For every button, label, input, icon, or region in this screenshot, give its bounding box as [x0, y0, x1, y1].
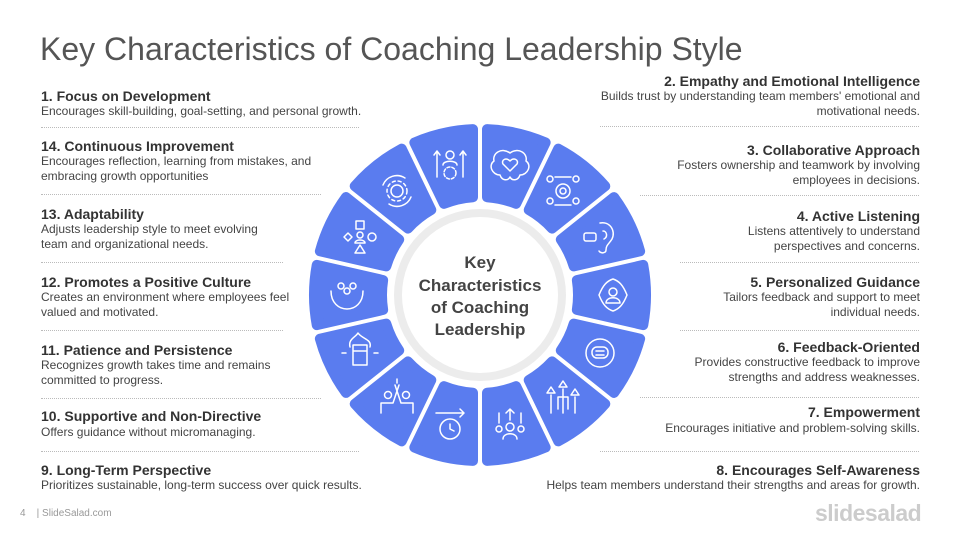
left item 12: valued and motivated.	[41, 305, 158, 319]
left item 11: committed to progress.	[41, 373, 163, 387]
left item 11	[41, 342, 270, 387]
right item 8	[546, 462, 920, 492]
left item 9	[41, 462, 362, 492]
icon: ear listening	[584, 223, 613, 253]
left item 13	[41, 206, 258, 251]
center circle: of Coaching	[431, 298, 529, 317]
left item 1: 1. Focus on Development	[41, 88, 211, 104]
left item 1: Encourages skill-building, goal-setting, and personal growth.	[41, 104, 361, 118]
right item 6: strengths and address weaknesses.	[729, 370, 920, 384]
right item 6	[695, 339, 920, 384]
icon: hands with people	[331, 283, 363, 309]
right item 4: Listens attentively to understand	[748, 224, 920, 238]
left item 13: Adjusts leadership style to meet evolving	[41, 222, 258, 236]
right item 2	[601, 73, 920, 118]
left item 14: 14. Continuous Improvement	[41, 138, 234, 154]
right item 4: perspectives and concerns.	[774, 239, 920, 253]
right item 5: individual needs.	[831, 305, 920, 319]
icon: collaboration	[547, 176, 579, 205]
icon: personalized guidance	[599, 279, 627, 311]
left item 10	[41, 408, 261, 439]
icon: high five	[381, 379, 413, 413]
left item 14: embracing growth opportunities	[41, 169, 208, 183]
icon: empowerment	[547, 381, 579, 413]
icon: feedback	[586, 339, 614, 367]
right item 2: 2. Empathy and Emotional Intelligence	[664, 73, 920, 89]
left item 10: 10. Supportive and Non-Directive	[41, 408, 261, 424]
left item 12	[41, 274, 289, 319]
left item 1	[41, 88, 361, 118]
center circle	[394, 209, 566, 381]
right item 5	[723, 274, 920, 319]
center circle: Key	[464, 253, 496, 272]
right item 3: Fosters ownership and teamwork by involving	[677, 158, 920, 172]
right item 3: 3. Collaborative Approach	[747, 142, 920, 158]
footer logo: slidesalad	[815, 500, 921, 526]
center circle: Characteristics	[419, 276, 541, 295]
right item 4	[748, 208, 920, 253]
left item 14	[41, 138, 311, 183]
right item 7: Encourages initiative and problem-solving skills.	[665, 421, 920, 435]
icon: self-awareness	[496, 409, 524, 439]
left item 13: team and organizational needs.	[41, 237, 208, 251]
icon: continuous improvement gear	[383, 176, 411, 206]
title: Key Characteristics of Coaching Leadership Style	[40, 31, 743, 67]
left item 12: 12. Promotes a Positive Culture	[41, 274, 251, 290]
left item 13: 13. Adaptability	[41, 206, 144, 222]
right item 8: 8. Encourages Self-Awareness	[716, 462, 920, 478]
left item 11: Recognizes growth takes time and remains	[41, 358, 270, 372]
right item 7	[665, 404, 920, 435]
right item 6: Provides constructive feedback to improve	[695, 355, 920, 369]
right item 3	[677, 142, 920, 187]
icon: fist fire	[342, 333, 378, 365]
icon: brain heart	[491, 151, 529, 180]
right item 7: 7. Empowerment	[808, 404, 920, 420]
icon: long-term clock	[436, 409, 464, 439]
icon: adaptability	[344, 221, 376, 253]
left item 10: Offers guidance without micromanaging.	[41, 425, 256, 439]
left item 9: 9. Long-Term Perspective	[41, 462, 211, 478]
right item 5: 5. Personalized Guidance	[750, 274, 920, 290]
left item 12: Creates an environment where employees feel	[41, 290, 289, 304]
right item 3: employees in decisions.	[793, 173, 920, 187]
footer page number: 4 | SlideSalad.com	[20, 508, 112, 519]
right item 6: 6. Feedback-Oriented	[778, 339, 920, 355]
left item 14: Encourages reflection, learning from mistakes, and	[41, 154, 311, 168]
right item 2: Builds trust by understanding team members' emotional and	[601, 89, 920, 103]
right item 4: 4. Active Listening	[797, 208, 920, 224]
left item 9: Prioritizes sustainable, long-term success over quick results.	[41, 478, 362, 492]
right item 5: Tailors feedback and support to meet	[723, 290, 920, 304]
icon: development	[434, 151, 466, 179]
right item 2: motivational needs.	[817, 104, 920, 118]
right item 8: Helps team members understand their strengths and areas for growth.	[546, 478, 920, 492]
center circle: Leadership	[435, 320, 525, 339]
left item 11: 11. Patience and Persistence	[41, 342, 232, 358]
